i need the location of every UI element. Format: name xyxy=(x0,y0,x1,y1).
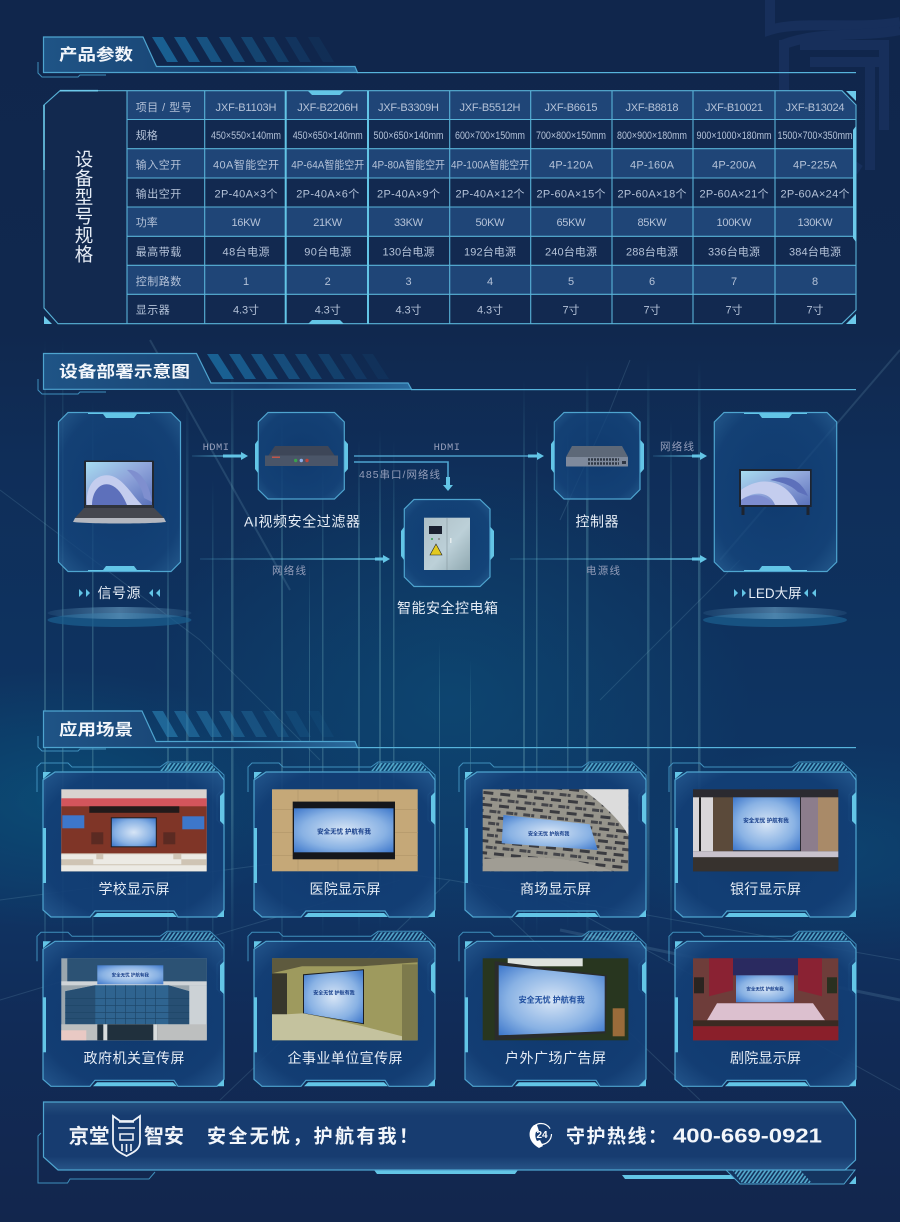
table values: input breaker: 4P-64A智能空开 xyxy=(291,158,364,172)
photo: theatre stage xyxy=(693,958,838,1040)
card: outdoor xyxy=(459,931,646,1086)
table values: display xyxy=(233,302,824,316)
icon: 24h phone xyxy=(530,1124,552,1148)
label: LED screen xyxy=(734,586,816,601)
icon: LED display xyxy=(739,469,812,515)
row labels: 项目 / 型号 xyxy=(136,100,192,114)
icon: laptop xyxy=(73,460,166,524)
platform: signal source xyxy=(48,607,192,627)
table values: control channels: 3 xyxy=(405,276,412,288)
photo: government building xyxy=(61,958,207,1040)
table values: control channels: 4 xyxy=(487,276,493,288)
table values: power: 100KW xyxy=(716,217,752,229)
table values: control channels: 2 xyxy=(325,276,331,288)
row labels: 规格 xyxy=(136,128,158,142)
table values: display: 4.3寸 xyxy=(233,302,259,316)
label: 企事业单位宣传屏 xyxy=(288,1050,402,1066)
table values: size: 1500×700×350mm xyxy=(778,130,852,142)
label: signal source: 信号源 xyxy=(98,585,140,601)
table values: max load: 336台电源 xyxy=(708,244,760,258)
table side title: 设 xyxy=(75,149,93,170)
table values: control channels: 8 xyxy=(812,276,818,288)
table values: output breaker: 2P-40A×3个 xyxy=(214,188,278,200)
row labels xyxy=(136,100,192,316)
table values: power: 130KW xyxy=(798,217,833,229)
label: LED screen: LED大屏 xyxy=(748,586,802,601)
photo: bank entrance: 安全无忧 护航有我 xyxy=(743,816,789,824)
label: 户外广场广告屏 xyxy=(505,1050,606,1066)
table values: output breaker: 2P-60A×24个 xyxy=(780,188,850,200)
table values: model: JXF-B1103H xyxy=(216,102,277,114)
table values: output breaker: 2P-60A×15个 xyxy=(536,188,606,200)
label: control box: 智能安全控电箱 xyxy=(397,600,498,616)
arrow: HDMI source to filter xyxy=(192,442,248,460)
table values: input breaker: 4P-80A智能空开 xyxy=(372,158,445,172)
table values: model: JXF-B2206H xyxy=(297,102,358,114)
table values: input breaker: 4P-225A xyxy=(793,160,838,172)
table values: display: 4.3寸 xyxy=(315,302,341,316)
table values: display: 7寸 xyxy=(726,302,742,316)
row labels: 输入空开 xyxy=(136,158,181,172)
arrow: HDMI source to filter: HDMI xyxy=(203,442,229,454)
table values: control channels: 6 xyxy=(649,276,655,288)
table values: max load xyxy=(222,244,841,258)
table values: output breaker: 2P-40A×6个 xyxy=(296,188,359,200)
table values: max load: 240台电源 xyxy=(545,244,597,258)
label: 学校显示屏 xyxy=(98,881,170,897)
device card: LED screen xyxy=(714,412,837,572)
table values: power: 85KW xyxy=(638,217,667,229)
table values: max load: 384台电源 xyxy=(789,244,841,258)
table values: model: JXF-B10021 xyxy=(705,102,763,114)
row labels: 显示器 xyxy=(136,304,170,316)
label: 医院显示屏 xyxy=(310,881,380,897)
table values: model: JXF-B5512H xyxy=(460,102,521,114)
table values: size: 450×550×140mm xyxy=(211,130,281,142)
card: government xyxy=(37,931,224,1086)
icon: control cabinet xyxy=(424,518,470,570)
card: mall xyxy=(459,762,646,917)
table values: output breaker: 2P-40A×9个 xyxy=(377,188,440,200)
table values: size: 600×700×150mm xyxy=(455,130,525,142)
logo: 智安 xyxy=(144,1125,184,1148)
card: bank xyxy=(669,762,856,917)
table values: output breaker: 2P-60A×18个 xyxy=(618,188,686,200)
card: school xyxy=(37,762,224,917)
arrow: HDMI filter to controller xyxy=(354,442,544,460)
label: 剧院显示屏 xyxy=(730,1050,801,1066)
table values: output breaker: 2P-60A×21个 xyxy=(700,188,768,200)
table values: input breaker: 4P-120A xyxy=(549,160,594,172)
arrow: HDMI filter to controller: HDMI xyxy=(434,442,460,454)
section header: 产品参数 xyxy=(38,37,856,77)
row labels: 功率 xyxy=(136,215,158,229)
table values: model: JXF-B8818 xyxy=(626,102,678,114)
photo: hospital wall screen xyxy=(272,789,418,871)
label: 商场显示屏 xyxy=(520,881,591,897)
table values: control channels: 5 xyxy=(568,276,574,288)
table values: power xyxy=(232,217,833,229)
photo: hospital wall screen: 安全无忧 护航有我 xyxy=(317,826,371,835)
table values: input breaker: 4P-200A xyxy=(712,160,757,172)
table values: size: 700×800×150mm xyxy=(536,130,606,142)
photo: outdoor billboard xyxy=(483,958,628,1040)
section header: 应用场景 xyxy=(38,711,856,751)
arrow: 485 to control box: 485串口/网络线 xyxy=(359,468,440,481)
photo: enterprise hall: 安全无忧 护航有我 xyxy=(313,989,355,996)
photo: outdoor billboard: 安全无忧 护航有我 xyxy=(519,994,585,1004)
card: hospital xyxy=(248,762,435,917)
row labels: 最高带载 xyxy=(136,244,181,258)
table values: control channels: 1 xyxy=(243,276,249,288)
table values: power: 21KW xyxy=(313,217,343,229)
photo: government building: 安全无忧 护航有我 xyxy=(112,971,149,978)
table side title: 号 xyxy=(75,206,93,227)
table side title: 备 xyxy=(75,168,93,189)
table values: power: 50KW xyxy=(476,217,505,229)
table side title xyxy=(75,149,94,265)
table values: control channels xyxy=(243,276,818,288)
table values: power: 33KW xyxy=(394,217,424,229)
arrow: network controller to LED: 网络线 xyxy=(660,440,694,453)
photo: mall facade xyxy=(483,789,628,871)
watermark logo xyxy=(770,0,900,170)
table values: model: JXF-B13024 xyxy=(786,102,844,114)
table values: display: 4.3寸 xyxy=(477,302,503,316)
label: filter: AI视频安全过滤器 xyxy=(244,514,360,530)
table values: size: 450×650×140mm xyxy=(293,130,363,142)
table values: model xyxy=(216,102,844,114)
table side title: 规 xyxy=(75,225,93,246)
row labels: 输出空开 xyxy=(136,186,181,200)
heading text: 产品参数 xyxy=(59,45,133,64)
label: controller: 控制器 xyxy=(576,514,618,530)
photo: theatre stage: 安全无忧 护航有我 xyxy=(746,985,784,992)
heading text: 应用场景 xyxy=(59,720,133,739)
table values: output breaker: 2P-40A×12个 xyxy=(456,188,524,200)
icon: network switch xyxy=(566,446,628,466)
arrow: network to control box: 网络线 xyxy=(272,564,306,577)
label: 政府机关宣传屏 xyxy=(84,1050,184,1066)
table values: display: 7寸 xyxy=(562,302,580,316)
hotline number: 400-669-0921 xyxy=(673,1126,822,1148)
table values: input breaker xyxy=(213,158,838,172)
table values: size xyxy=(211,130,852,142)
table side title: 格 xyxy=(75,244,94,265)
card: enterprise xyxy=(248,931,435,1086)
platform: LED screen xyxy=(703,607,847,627)
table values: max load: 48台电源 xyxy=(222,244,270,258)
table values: display: 7寸 xyxy=(644,302,660,316)
logo: 京堂 xyxy=(68,1124,110,1148)
table values: power: 16KW xyxy=(232,217,261,229)
logo xyxy=(68,1116,184,1156)
slogan: 安全无忧，护航有我！ xyxy=(207,1124,418,1148)
device card: power control box xyxy=(401,500,494,586)
table values: input breaker: 4P-160A xyxy=(630,160,675,172)
table values: size: 500×650×140mm xyxy=(374,130,444,142)
table values: max load: 90台电源 xyxy=(304,244,351,258)
arrow: network to control box xyxy=(200,555,390,577)
label: 银行显示屏 xyxy=(730,881,801,897)
table values: model: JXF-B3309H xyxy=(378,102,439,114)
table values: size: 800×900×180mm xyxy=(617,130,687,142)
photo: mall facade: 安全无忧 护航有我 xyxy=(528,830,569,837)
label: signal source xyxy=(79,585,160,601)
table values: size: 900×1000×180mm xyxy=(696,130,772,142)
panel: spec table xyxy=(44,91,856,324)
table values: input breaker: 40A智能空开 xyxy=(213,158,279,172)
device card: controller xyxy=(551,412,644,499)
photo: bank entrance xyxy=(693,789,838,871)
table values: display: 4.3寸 xyxy=(396,302,422,316)
table values: max load: 192台电源 xyxy=(464,244,516,258)
card: theatre xyxy=(669,931,856,1086)
row labels: 控制路数 xyxy=(136,274,181,288)
icon: filter device xyxy=(265,446,338,466)
table values: max load: 130台电源 xyxy=(382,244,434,258)
table values: model: JXF-B6615 xyxy=(544,102,598,114)
hotline: 守护热线： xyxy=(566,1126,667,1148)
table values: power: 65KW xyxy=(556,217,586,229)
photo: enterprise hall xyxy=(272,958,418,1040)
arrow: 485 to control box xyxy=(354,462,453,491)
arrow: network controller to LED xyxy=(653,440,707,460)
panel: deployment diagram xyxy=(48,412,847,627)
table values: control channels: 7 xyxy=(731,276,737,288)
icon: 24h phone: 24 xyxy=(536,1130,548,1141)
device card: filter xyxy=(255,412,348,499)
table values: max load: 288台电源 xyxy=(626,244,678,258)
device card: signal source xyxy=(58,412,180,572)
arrow: power to LED xyxy=(510,555,707,577)
table values: output breaker xyxy=(214,188,850,200)
table values: display: 7寸 xyxy=(806,302,824,316)
panel: footer banner xyxy=(38,1102,856,1184)
table values: input breaker: 4P-100A智能空开 xyxy=(451,158,529,172)
table side title: 型 xyxy=(75,187,93,208)
arrow: power to LED: 电源线 xyxy=(586,564,620,577)
photo: school hall xyxy=(61,789,207,871)
section header: 设备部署示意图 xyxy=(38,354,856,394)
heading text: 设备部署示意图 xyxy=(59,362,190,381)
